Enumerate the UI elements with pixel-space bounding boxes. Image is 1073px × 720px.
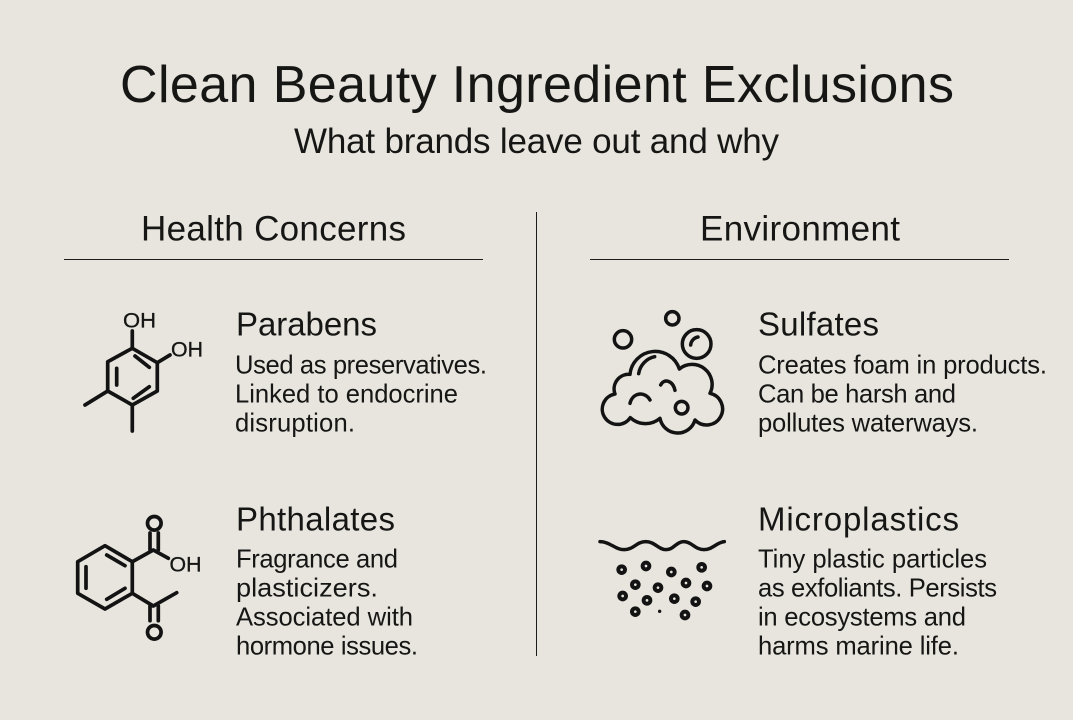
- heading: environment: Environment: [700, 210, 900, 248]
- phthalates description: Associated with: [236, 604, 413, 632]
- title: Clean Beauty Ingredient Exclusions: [120, 56, 954, 114]
- icon: foam cloud: [602, 312, 723, 433]
- icon: parabens molecule: [85, 308, 203, 431]
- microplastics description: [758, 546, 997, 660]
- sulfates title: Sulfates: [758, 306, 879, 342]
- icon: phthalates molecule: [78, 516, 202, 639]
- icon: parabens molecule: OH: [171, 338, 203, 362]
- heading: health concerns: Health Concerns: [141, 210, 406, 248]
- icon: phthalates molecule: OH: [170, 552, 202, 576]
- panel: health concerns: [64, 210, 487, 660]
- parabens description: Linked to endocrine: [235, 380, 458, 408]
- sulfates description: Creates foam in products.: [758, 352, 1047, 380]
- center divider: [536, 212, 538, 656]
- phthalates title: Phthalates: [236, 500, 395, 538]
- parabens description: disruption.: [235, 410, 355, 438]
- sulfates description: [758, 352, 1047, 438]
- microplastics description: in ecosystems and: [758, 604, 966, 632]
- phthalates description: [236, 546, 418, 660]
- panel: environment: [590, 210, 1047, 660]
- microplastics description: Tiny plastic particles: [758, 546, 987, 574]
- sulfates description: pollutes waterways.: [758, 410, 978, 438]
- microplastics title: Microplastics: [758, 500, 959, 538]
- subtitle: What brands leave out and why: [294, 122, 780, 161]
- sulfates description: Can be harsh and: [758, 380, 956, 408]
- parabens description: Used as preservatives.: [235, 352, 487, 380]
- microplastics description: as exfoliants. Persists: [758, 574, 997, 602]
- icon: parabens molecule: OH: [123, 308, 156, 332]
- parabens title: Parabens: [236, 306, 377, 342]
- microplastics description: harms marine life.: [758, 632, 959, 660]
- phthalates description: plasticizers.: [236, 574, 378, 602]
- phthalates description: hormone issues.: [236, 632, 418, 660]
- parabens description: [235, 352, 487, 438]
- icon: microplastics in water: [600, 542, 724, 618]
- phthalates description: Fragrance and: [236, 546, 398, 574]
